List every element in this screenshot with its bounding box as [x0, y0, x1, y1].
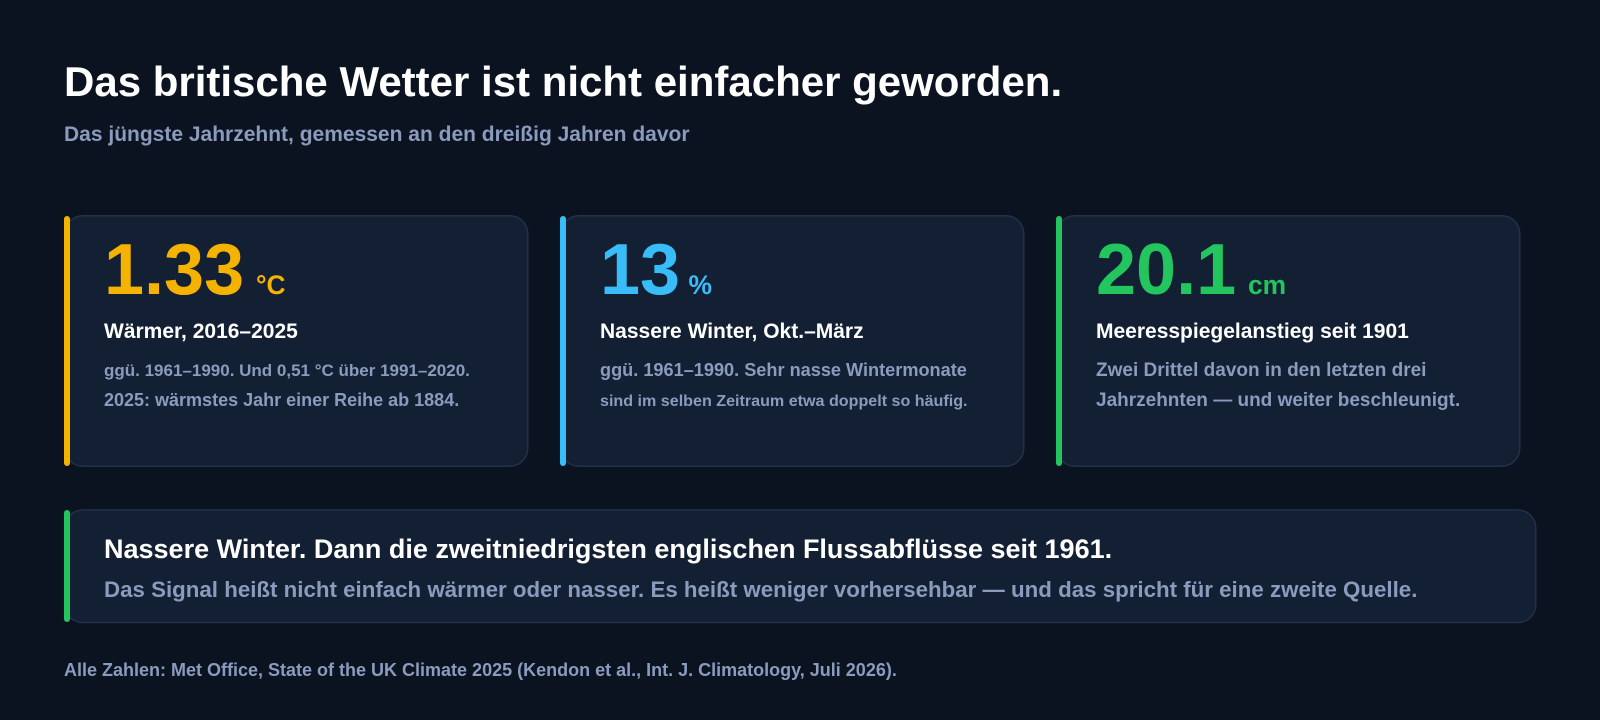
description: wetter winters: ggü. 1961–1990. Sehr nasse Wintermonate [600, 360, 967, 380]
subtitle: Das jüngste Jahrzehnt, gemessen an den dreißig Jahren davor [64, 123, 690, 146]
callout heading: Nassere Winter. Dann die zweitniedrigsten englischen Flussabflüsse seit 1961. [104, 534, 1112, 564]
source note: Alle Zahlen: Met Office, State of the UK Climate 2025 (Kendon et al., Int. J. Climatology, Juli 2026). [64, 660, 897, 680]
accent bar: green [64, 510, 70, 622]
stat: 1.33 °C: 1.33 [104, 230, 244, 310]
accent bar: amber [64, 216, 70, 466]
callout panel [64, 510, 1536, 622]
stat: 13 %: 13 [600, 230, 680, 310]
callout text: Das Signal heißt nicht einfach wärmer oder nasser. Es heißt weniger vorhersehbar — und das spricht für eine zweite Quelle. [104, 577, 1417, 602]
panel: sea level [1056, 216, 1520, 466]
description: sea level: Jahrzehnten — und weiter beschleunigt. [1096, 390, 1460, 411]
accent bar: green [1056, 216, 1062, 466]
title: Das britische Wetter ist nicht einfacher geworden. [64, 58, 1062, 105]
description: warmer: 2025: wärmstes Jahr einer Reihe ab 1884. [104, 390, 459, 410]
description: warmer [104, 361, 470, 410]
description: wetter winters: sind im selben Zeitraum etwa doppelt so häufig. [600, 392, 968, 410]
accent bar: blue [560, 216, 566, 466]
label: warmer: Wärmer, 2016–2025 [104, 320, 298, 343]
label: wetter winters: Nassere Winter, Okt.–März [600, 320, 864, 343]
description: sea level [1096, 360, 1460, 411]
stat: 20.1 cm: cm [1248, 270, 1286, 300]
panel: wetter winters [560, 216, 1024, 466]
stat: 20.1 cm: 20.1 [1096, 230, 1236, 310]
stat: 1.33 °C: °C [256, 270, 286, 300]
description: wetter winters [600, 360, 968, 410]
panel: warmer [64, 216, 528, 466]
description: sea level: Zwei Drittel davon in den letzten drei [1096, 360, 1426, 381]
stat: 13 %: % [688, 270, 712, 300]
label: sea level: Meeresspiegelanstieg seit 1901 [1096, 320, 1409, 343]
description: warmer: ggü. 1961–1990. Und 0,51 °C über 1991–2020. [104, 361, 470, 380]
